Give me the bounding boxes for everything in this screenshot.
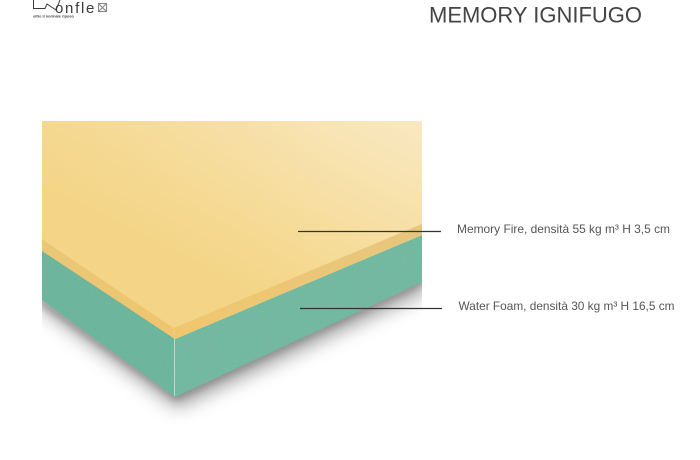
memory fire top face xyxy=(42,121,422,328)
mattress illustration xyxy=(38,121,426,408)
water foam layer xyxy=(42,235,422,397)
logo xyxy=(33,0,106,18)
leader line xyxy=(300,308,442,310)
memory fire layer side xyxy=(42,239,175,339)
mattress shadow xyxy=(38,270,426,408)
leader line xyxy=(298,230,441,232)
logo mark xyxy=(34,0,60,10)
foam corner seam xyxy=(174,339,176,396)
logo wordmark: onfle xyxy=(55,0,96,17)
logo tagline: oltre il normale riposo xyxy=(33,14,74,18)
label: Memory Fire, densità 55 kg m³ H 3,5 cm xyxy=(457,222,670,236)
label: Water Foam, densità 30 kg m³ H 16,5 cm xyxy=(458,299,674,313)
logo x icon xyxy=(98,4,106,12)
title: MEMORY IGNIFUGO xyxy=(429,2,642,28)
